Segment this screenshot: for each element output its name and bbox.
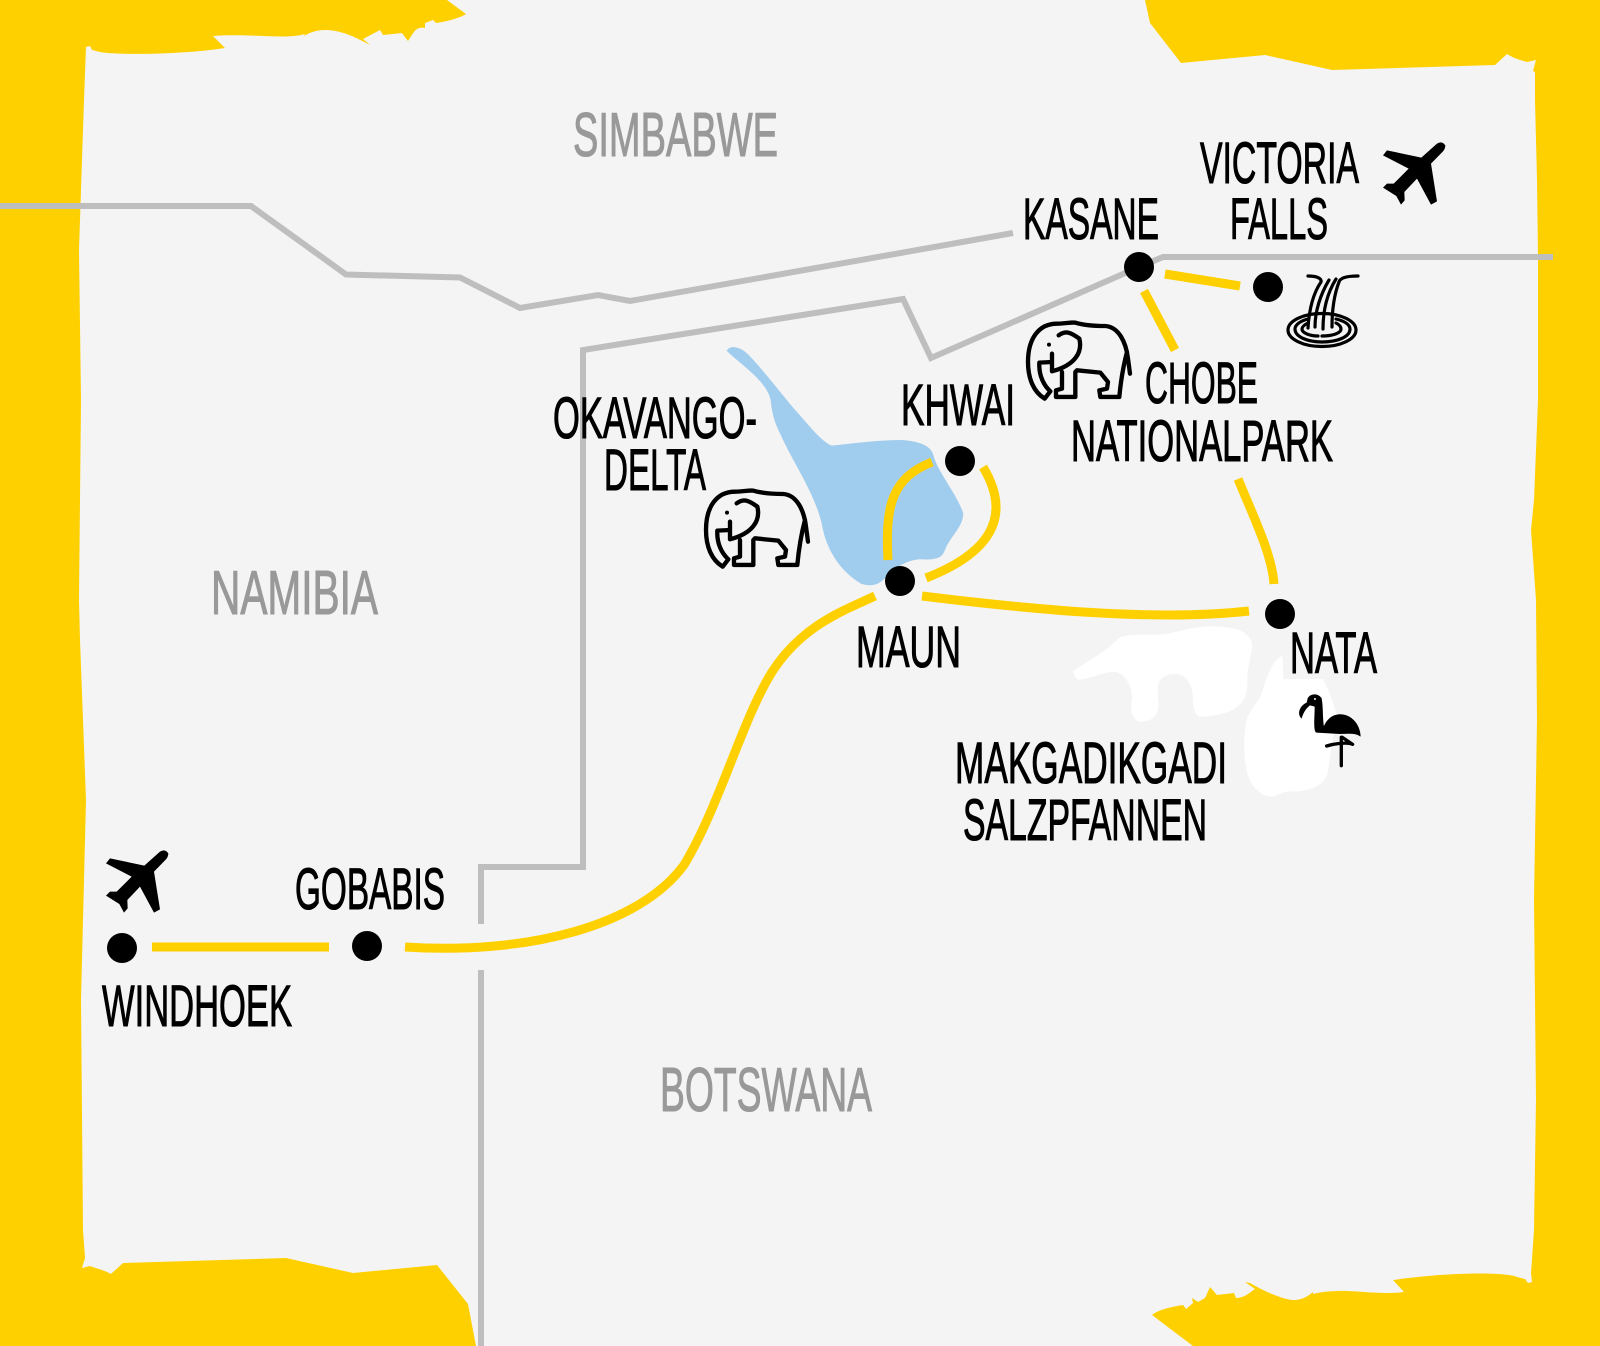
Makgadikgadi salt pans [1073, 626, 1337, 797]
label: Chobe Nationalpark: CHOBE [1145, 351, 1258, 416]
icon: flamingo [1299, 694, 1361, 766]
label: Chobe Nationalpark: NATIONALPARK [1071, 409, 1333, 474]
label: Okavango-Delta [553, 386, 757, 503]
label: Makgadikgadi Salzpfannen [955, 731, 1227, 853]
country label: Simbabwe: SIMBABWE [573, 101, 778, 170]
label: Victoria Falls: VICTORIA [1200, 131, 1359, 196]
label: Okavango-Delta: DELTA [604, 438, 706, 503]
label: Victoria Falls [1200, 131, 1359, 252]
icon: waterfall [1288, 276, 1358, 346]
label: Nata: NATA [1290, 621, 1377, 686]
route lines [152, 274, 1274, 948]
icon: elephant Okavango [706, 490, 808, 567]
icon: elephant Chobe [1028, 322, 1130, 399]
label: Makgadikgadi Salzpfannen: SALZPFANNEN [963, 788, 1207, 853]
icon: plane Victoria Falls [1383, 142, 1445, 205]
label: Khwai: KHWAI [901, 373, 1015, 438]
country label: Botswana: BOTSWANA [660, 1056, 872, 1125]
Okavango delta water [727, 347, 963, 585]
icon: plane Windhoek [106, 850, 168, 913]
label: Maun: MAUN [856, 615, 961, 680]
label: Kasane: KASANE [1023, 187, 1159, 252]
label: Gobabis: GOBABIS [295, 857, 445, 922]
label: Chobe Nationalpark [1071, 351, 1333, 474]
label: Okavango-Delta: OKAVANGO- [553, 386, 757, 451]
stop markers [107, 252, 1295, 963]
label: Windhoek: WINDHOEK [102, 974, 292, 1039]
country label: Namibia: NAMIBIA [211, 559, 378, 628]
label: Victoria Falls: FALLS [1230, 187, 1328, 252]
label: Makgadikgadi Salzpfannen: MAKGADIKGADI [955, 731, 1227, 796]
